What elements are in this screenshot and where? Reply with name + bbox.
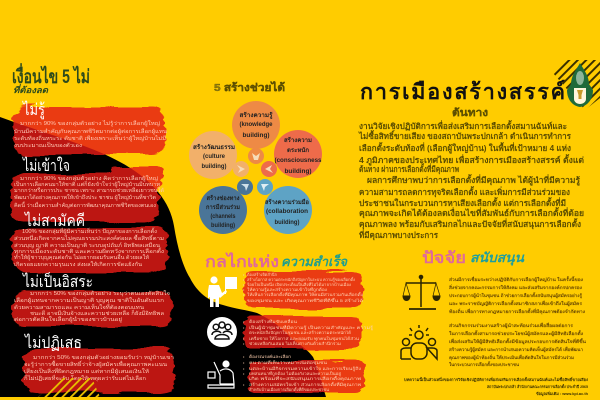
circle: channels: สร้างช่องทาง bbox=[206, 194, 240, 202]
icon: scales bbox=[403, 275, 440, 309]
condition 1: ระดับท้องถิ่นหระระ ดับชาติ เพียงเพราะเห็นว่าผู้ใหญ่บ้านไม่มี bbox=[14, 134, 166, 142]
bullet list 1: ของชุมชน และ เกิดคุณภาพชีวิตที่ดีขึ้น 5 สร้างได้ bbox=[247, 296, 364, 304]
bullet list 2: เป็นผู้นำชุมชนที่มีความรู้ เป็นความสำคัญและ ความรู้ bbox=[249, 324, 373, 331]
brush stroke 2 bbox=[11, 166, 162, 222]
body text: ความสามารถลดการทุจริตเลือกตั้ง และเพิ่มการมีส่วนร่วมของ bbox=[359, 185, 570, 198]
condition 1: มากกว่า 90% ของกลุ่มตัวอย่าง ไม่รู้ว่าการเลือกผู้ใหญ่ bbox=[20, 119, 161, 127]
bullet list 3: • bbox=[243, 382, 245, 387]
condition 4: ด้วยความสามารถและ ความเห็นใจที่ต้องตอบแทน bbox=[14, 303, 145, 311]
condition 5: เสียงเป็นสิ่งที่ผิดกฎหมาย แต่หากมีผู้เสนอเงินให้ bbox=[24, 367, 150, 375]
body text: คุณภาพจะเกิดได้ต้องลดเงื่อนไขที่สัมพันธ์กับการเลือกตั้งที่ด้อย bbox=[359, 206, 584, 219]
condition 4: เลือกผู้แทนจากความเป็นญาติ บุญคุณ ชาติในอันดับแรก bbox=[14, 296, 164, 304]
circle: culture: building) bbox=[202, 164, 226, 170]
bullet list 3 bbox=[243, 354, 362, 392]
brush stroke 1 bbox=[13, 107, 166, 155]
condition 4: ชนะดี อาจมีเงินจ้างและความช่วยเหลือ ก็ยังมีอิทธิพล bbox=[30, 309, 164, 317]
hatch decoration bbox=[38, 378, 100, 397]
background swoosh bbox=[0, 117, 326, 397]
bullet list 1: • bbox=[243, 292, 245, 297]
bullet list 3: คน ตามที่เห็นว่าเหมาะสมต่อชุมชน bbox=[249, 359, 327, 366]
condition 5: จะรู้ว่าการซื้อขายสิทธิ์ว่าจ้างผู้สมัครเพื่อคุณภาพคะแนน bbox=[24, 360, 168, 368]
body text bbox=[358, 119, 584, 241]
bullet list 3: • bbox=[243, 366, 245, 371]
condition 5: ไม่ปฏิเสธ bbox=[23, 333, 82, 352]
bullet list 3: • bbox=[243, 354, 245, 359]
circle: culture: (culture bbox=[203, 154, 226, 160]
heading: factors: ปัจจัย bbox=[422, 249, 466, 267]
circle: consciousness bbox=[261, 130, 322, 178]
heading: five building blocks: 5 สร้างช่วยได้ bbox=[214, 81, 285, 94]
bullet list 2: • bbox=[243, 325, 245, 330]
panel: five conditions bbox=[11, 63, 175, 397]
circle: channels: building) bbox=[211, 223, 235, 229]
supporting text 1: ท้องถิ่น เพื่อการทางกฎหมายการเลือกตั้งที่มีคุณภาพต้องจำกัดทาง bbox=[449, 307, 585, 315]
body text: ต้นทาง ผ่านการเลือกตั้งที่มีคุณภาพ bbox=[359, 162, 459, 175]
heading: support: สนับสนุน bbox=[470, 250, 525, 266]
circle: consciousness: (consciousness bbox=[274, 158, 322, 164]
circle: knowledge bbox=[232, 101, 280, 164]
icon: person with flag bbox=[208, 276, 237, 307]
hatch decoration: top right bbox=[553, 60, 600, 110]
supporting text 2 bbox=[449, 322, 586, 367]
bullet list 3: • bbox=[243, 360, 245, 365]
bullet list 2: ตระหนักถึงปัญหาในชุมชน และสร้างความตระหนักได้ bbox=[249, 330, 352, 336]
condition 2: คิดนี้ ว่าเมื่อความสำคัญต่อการพัฒนาคุณภาพชีวิตของตนเอง bbox=[14, 201, 156, 209]
footer credits: สถาบันพระปกเกล้า สำนักงานคณะกรรมการเลือกตั้ง ประจำปี 2565 bbox=[487, 383, 588, 389]
condition 2: พัฒนาได้อย่างคุณภาพให้เข้าถึงประ ชาชน ผู้ใหญ่บ้านที่ชาวิต bbox=[14, 193, 156, 201]
circle: collaboration: สร้างความร่วมมือ bbox=[265, 198, 309, 206]
icon: group in circle bbox=[207, 317, 237, 347]
bullet list 3: • bbox=[243, 371, 245, 376]
circle: channels: (channels bbox=[210, 214, 236, 220]
body text: งานวิจัยเชิงปฏิบัติการเพื่อส่งเสริมการเลือกตั้งสมานฉันท์และ bbox=[359, 119, 567, 131]
circle: culture: สร้างวัฒนธรรม bbox=[193, 143, 235, 151]
heading: mechanisms: กลไกแห่ง bbox=[205, 252, 279, 271]
supporting text 1: ประกอบการผู้นำในชุมชน ถ้าช่วยการเลือกตั้งสนับสนุนผู้สมัครอย่างรู้ bbox=[449, 291, 583, 299]
condition 1: บ้านมีความสำคัญกับคุณภาพชีวิตมากต่อผู้ต่อการเลือกผู้แทน bbox=[14, 128, 168, 135]
circle: knowledge: สร้างความรู้ bbox=[240, 111, 273, 120]
bullet list 2: • bbox=[243, 341, 245, 346]
subheading: ที่ต้องลด bbox=[13, 84, 49, 95]
condition 1 bbox=[14, 100, 168, 149]
bullet list 2: • bbox=[243, 336, 245, 341]
brush stroke 4 bbox=[12, 291, 172, 327]
condition 4: ต่อการตัดสินใจเลือกผู้นำของชาวบ้านอยู่ bbox=[14, 316, 122, 323]
condition 3: ไม่สามัคคี bbox=[23, 211, 85, 230]
supporting text 1: สิ่งช่วยจากคณะกรรมการให้สังคม และส่งเสริมจากองค์กรปกครอง bbox=[449, 284, 582, 290]
supporting text 1: ส่วนมีการเชื่อมระหว่างปฏิบัติกับการเลือกผู้ใหญ่บ้าน ในครั้งนี้ของ bbox=[449, 275, 583, 283]
circle: culture bbox=[189, 131, 249, 179]
bullet list 1: ร้อยใจเป็นหนึ่ง เปิดประเด็นเป็นสิ่งที่ไม่ได้มาจากบ้านเมือง bbox=[247, 281, 351, 287]
condition 5: ก็ไม่ปฏิเสธที่จะรับ โดยให้เหตุผลว่ารับแต่ไม่เลือก bbox=[24, 374, 146, 382]
brush stroke: mechanism 2 bbox=[244, 316, 361, 349]
brush stroke: mechanism 3 bbox=[249, 361, 363, 393]
condition 2: เป็นการเลือกคนมาให้ชาติ แต่ก็ยังเข้าใจว่าผู้ใหญ่บ้านมีบทบาท bbox=[14, 180, 161, 188]
condition 2: มากกว่า 90% ของกลุ่มตัวอย่าง คิดว่าการเลือกผู้ใหญ่ bbox=[20, 175, 159, 182]
body text: ไม่ซื้อสิทธิ์ขายเสียง ของสถาบันพระปกเกล้า ดำเนินการทำการ bbox=[358, 129, 572, 141]
footer credits bbox=[404, 376, 589, 397]
bullet list 1: • bbox=[243, 282, 245, 287]
panel: five building blocks bbox=[189, 81, 322, 234]
bullet list 1: ต้องสร้างจิตสำนึก bbox=[247, 272, 278, 277]
bullet list 1: สร้างโอกาส ความตระหนักถึงปัญหาในระบบ ความรู้ของเลือกตั้ง bbox=[247, 275, 355, 283]
bullet list 1: ให้ความรู้และสร้างความเข้าใจที่ถูกต้อง bbox=[247, 287, 327, 293]
condition 3: ส่วนหนึ่งเกิดจากคนไม่คุณธรรมประสงค์ต่อผล ซื้อสิทธิ์ตาม bbox=[14, 234, 164, 242]
supporting text 1: และ พระราชบัญญัติการเลือกตั้งสมาชิกสภาเพื่อเข้าถึงในผู้สมัคร bbox=[449, 299, 583, 307]
body text: 4 ภูมิภาคของประเทศไทย เพื่อสร้างการเมืองสร้างสรรค์ ตั้งแต่ bbox=[359, 153, 584, 166]
condition 1: ไม่รู้ bbox=[21, 100, 45, 120]
condition 1: งบประมาณเป็นของตัวเอง bbox=[14, 141, 83, 149]
subheading: upstream: ต้นทาง bbox=[452, 107, 488, 119]
condition 5 bbox=[23, 333, 174, 382]
condition 2 bbox=[14, 156, 164, 209]
body text: ผลการศึกษาพบว่าการเลือกตั้งที่มีคุณภาพ ได้ผู้นำที่มีความรู้ bbox=[367, 173, 581, 186]
circle: collaboration bbox=[257, 179, 312, 234]
supporting text 2: สร้างความรู้ผู้สมัคร และการนำเสนอความคิดเห็นผู้สมัครได้ เพื่อพัฒนา bbox=[449, 345, 584, 353]
panel: mechanisms of success bbox=[205, 252, 373, 393]
condition 3: เกิดรอยแยกความรุนแรง ส่งผลให้เกิดการขัดแย้งกัน bbox=[14, 261, 142, 268]
panel: supporting factors bbox=[401, 249, 589, 397]
supporting text 2: คุณภาพของผู้นำท้องถิ่น ให้ประเมินเพื่อตัดสินใจในการมีส่วนร่วม bbox=[449, 354, 574, 361]
condition 5: มากกว่า 50% ของกลุ่มตัวอย่างยอมรับว่า หมู่บ้านเขา bbox=[33, 354, 174, 361]
bullet list 2 bbox=[243, 319, 373, 346]
body text: เลือกตั้งระดับท้องที่ (เลือกผู้ใหญ่บ้าน) ในพื้นที่เป้าหมาย 4 แห่ง bbox=[359, 141, 571, 154]
bullet list 1: ให้เห็นการเลือกตั้งที่มีคุณภาพ ให้คนมีส่วนร่วมกันเลือกตั้ง bbox=[247, 290, 363, 298]
condition 3 bbox=[14, 211, 165, 268]
supporting text 2: ในกระบวนการเลือกตั้งของประชาชน bbox=[449, 360, 519, 367]
bullet list 1: • bbox=[243, 277, 245, 282]
bullet list 1: • bbox=[243, 272, 245, 277]
bullet list 3: สร้างความสมัครใจเข้า ส่วนการเลือกตั้งที่มีคุณภาพ bbox=[249, 380, 362, 388]
bullet list 3: ต้องรณรงค์และเลือก bbox=[249, 354, 292, 359]
condition 4: ไม่เป็นอิสระ bbox=[21, 271, 93, 291]
bullet list 3: เกิด พร้อมที่จะสนับสนุนการเลือกตั้งคุณภาพ bbox=[249, 374, 362, 382]
bullet list 3: สำหรับบ้านเมืองการเลือกตั้งที่ดีของประชาชน bbox=[249, 385, 329, 392]
supporting text 2: ส่วนกิจกรรมร่วมงานสร้างผู้นำสะท้อนร่วมเพื่อสื่อผลต่อการ bbox=[449, 322, 574, 329]
body text: ที่มีคุณภาพบางประการ bbox=[359, 229, 439, 241]
supporting text 1 bbox=[449, 275, 585, 315]
condition 2: มากกว่าหรือการประ ชาชน เพราะ สามารถช่วยเหลือเยาวชนได้ bbox=[14, 186, 164, 194]
bullet list 2: ต้องสร้างทีมขับเคลื่อน bbox=[249, 319, 297, 324]
heading: success: ความสำเร็จ bbox=[281, 253, 348, 269]
bullet list 1 bbox=[243, 272, 364, 304]
bullet list 1: • bbox=[243, 287, 245, 292]
supporting text 2: เพื่อส่งเสริมให้ผู้มีสิทธิเลือกตั้งมีข้อมูลประกอบการตัดสินใจที่ดีขึ้น bbox=[449, 337, 586, 345]
condition 3: ทำให้ผู้ชาวบุญคุณต่อกัน ไม่อยากยอมรับคนอื่น ด้วยผลให้ bbox=[14, 253, 150, 261]
condition 2: ไม่เข้าใจ bbox=[21, 156, 70, 175]
condition 4 bbox=[14, 271, 170, 323]
footer credits: ข้อมูลเพิ่มเติม : www.kpi.ac.th bbox=[536, 390, 589, 397]
bullet list 2: เครือข่าย ให้โอกาส และยอมรับ ทุกคนในชุมชนได้ส่วน bbox=[249, 336, 359, 342]
circle: channels bbox=[199, 179, 253, 234]
bullet list 3: บทสนทนาที่ถูกต้อง ไม่ต้องกังวลและความเป็นอยู่ bbox=[249, 370, 341, 377]
main title: การเมืองสร้างสรรค์ bbox=[360, 79, 565, 104]
bullet list 3: แต่ละบ้านมีกิจกรรมความเข้าใจ และการเรียนรู้ถึง bbox=[249, 366, 361, 372]
condition 3: 100% ของกลุ่มที่ผู้มีความเห็นว่า ปัญหาของการเลือกตั้ง bbox=[22, 227, 158, 235]
circle: consciousness: ตระหนัก bbox=[287, 146, 309, 154]
brush stroke: mechanism 1 bbox=[244, 271, 362, 308]
circle: consciousness: building) bbox=[284, 169, 312, 175]
icon: institute seal bbox=[567, 63, 593, 107]
circle: knowledge: building) bbox=[242, 133, 270, 139]
circle: knowledge: (knowledge bbox=[240, 122, 273, 128]
condition 3: ส่วนบุญ ญาติ ความเป็นญาติ ระบบอุปถัมภ์ อิทธิพลเสมือน bbox=[14, 241, 161, 249]
circle: collaboration: (collaboration bbox=[266, 209, 308, 215]
brush stroke 3 bbox=[11, 227, 168, 273]
icon: team bbox=[401, 325, 437, 359]
circle: collaboration: building) bbox=[274, 220, 300, 226]
circle: consciousness: สร้างความ bbox=[284, 136, 312, 144]
supporting text 2: ในการเลือกตั้งสามารถช่วยประโยชน์ผู้สมัครและผู้มีสิทธิเลือกตั้ง bbox=[449, 329, 583, 337]
panel: creative politics bbox=[358, 79, 584, 241]
condition 4: มากกว่า 50% ของกลุ่มตัวอย่าง ระบุว่าตนเองตัดสินใจ bbox=[30, 290, 170, 297]
icon: raised hand figure bbox=[208, 361, 234, 388]
footer credits: บทความนี้เป็นส่วนหนึ่งของการวิจัยเชิงปฏิบัติการเพื่อส่งเสริมการเลือกตั้งสมานฉันท์และไม่ซื้อสิทธิ์ขายเสียง bbox=[404, 376, 588, 383]
circle: channels: การมีส่วนร่วม bbox=[206, 203, 240, 211]
body text: คุณภาพลง พร้อมกับเสริมกลไกและปัจจัยที่สนับสนุนการเลือกตั้ง bbox=[359, 217, 581, 230]
body text: ประชาชนในกระบวนการหาเสียงเลือกตั้ง แต่การเลือกตั้งที่มี bbox=[359, 196, 566, 208]
condition 3: ทุกการเมืองระดับชาติ และความผิดหวังจากการเลือกตั้ง bbox=[14, 247, 165, 255]
bullet list 2: • bbox=[243, 319, 245, 324]
brush stroke 5 bbox=[23, 348, 175, 393]
bullet list 2: ช่วยเหลือกันเสมอ ไม่เห็นต่างกันด้วยสำนึกร่วม bbox=[249, 340, 342, 346]
heading: five conditions: เงื่อนไข 5 ไม่ bbox=[12, 63, 90, 88]
